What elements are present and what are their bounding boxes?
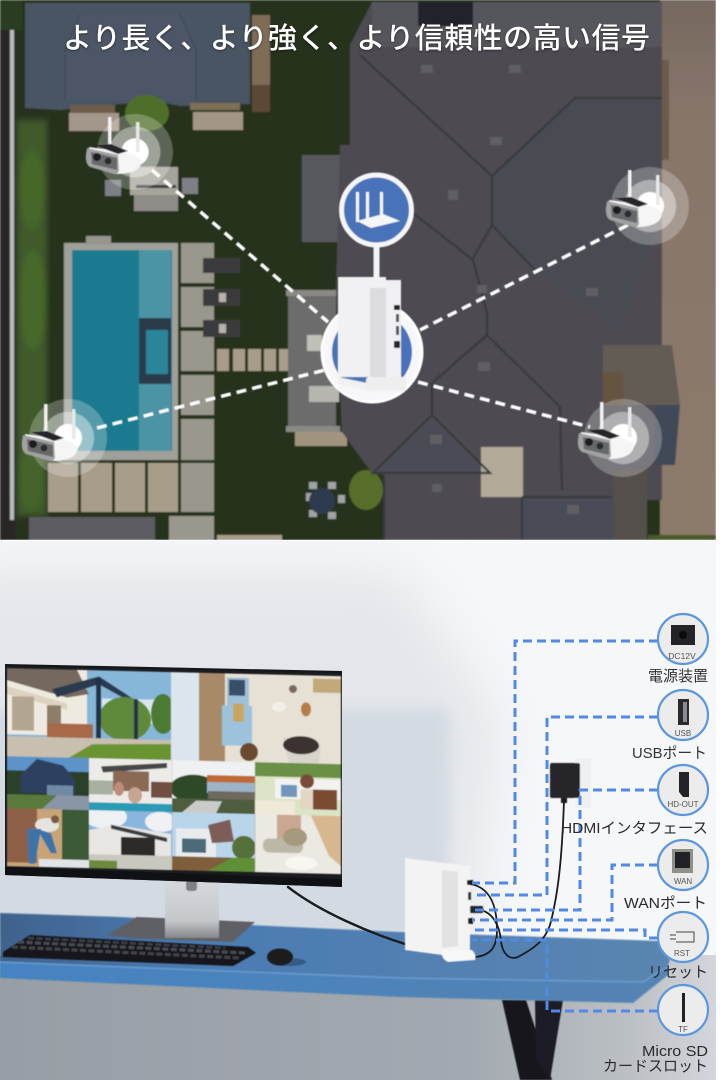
desk surface — [0, 913, 672, 1003]
tile: interior top view — [254, 813, 342, 875]
tile: pool with people — [88, 757, 173, 813]
tile: white house — [88, 809, 173, 871]
cables — [288, 800, 564, 958]
outdoor kitchen near camera — [130, 167, 178, 195]
port: WAN: WAN — [674, 877, 692, 886]
patio table with chairs — [306, 482, 345, 519]
dashed port connectors — [472, 641, 658, 1011]
port: HD-OUT — [658, 765, 708, 815]
camera: top right — [606, 167, 689, 245]
mouse — [267, 948, 306, 966]
tile: modern villa — [171, 811, 256, 873]
label: Micro SD card slot — [603, 1043, 708, 1075]
main house roof — [336, 2, 662, 540]
table legs — [502, 1000, 563, 1080]
roof top band with solar panel — [372, 2, 662, 47]
tile: patio house — [6, 668, 172, 761]
label: WAN: WANポート — [624, 895, 707, 912]
loungers — [203, 258, 240, 337]
port: DC12V: DC12V — [668, 651, 696, 661]
port: TF: TF — [678, 1025, 688, 1034]
small side roof — [302, 155, 340, 242]
tile: modern house by lake — [171, 759, 256, 815]
port: RST — [658, 912, 708, 962]
lawn background — [0, 0, 716, 540]
title: より長く、より強く、より信頼性の高い信号 — [63, 23, 650, 56]
icon: router badge — [342, 175, 412, 281]
hedge — [17, 120, 47, 516]
pavers — [169, 243, 214, 540]
label: power: 電源装置 — [648, 668, 708, 685]
bush — [349, 470, 383, 510]
port: RST: RST — [674, 949, 690, 958]
tile: living room top view — [170, 671, 342, 766]
monitor frame — [5, 665, 342, 887]
product: signal hub — [322, 277, 422, 402]
patio — [288, 293, 336, 429]
terrace — [481, 447, 523, 497]
aerial photo panel — [0, 0, 716, 540]
port: HD-OUT: HD-OUT — [667, 800, 699, 809]
monitor top edge — [5, 665, 342, 672]
port: USB: USB — [675, 729, 691, 738]
camera: bottom right — [578, 399, 662, 477]
camera: top left — [86, 114, 173, 190]
tile: blue house — [6, 756, 90, 811]
label: Micro SD card slot: カードスロット — [603, 1058, 708, 1075]
wood deck pieces — [662, 60, 669, 160]
power adapter — [550, 758, 591, 808]
port: TF — [658, 985, 708, 1035]
keyboard — [3, 935, 256, 966]
monitor chin — [5, 867, 342, 887]
monitor stand — [107, 880, 255, 942]
spa — [139, 318, 171, 384]
port: DC12V — [658, 614, 708, 664]
pool water — [72, 250, 172, 451]
label: reset: リセット — [648, 964, 708, 981]
dashed signal links — [97, 170, 628, 428]
monitor — [5, 665, 342, 942]
port: USB — [658, 690, 708, 740]
under-desk wall — [0, 955, 716, 1080]
lower desk scene panel — [0, 541, 716, 1080]
neighbor house roof — [25, 3, 250, 110]
label: USB: USBポート — [632, 745, 707, 762]
roof ridges — [360, 55, 662, 540]
title: より長く、より強く、より信頼性の高い信号 — [63, 22, 650, 55]
label: HDMI: HDMIインタフェース — [561, 820, 708, 837]
port: WAN — [658, 840, 708, 890]
tile: delivery porch — [254, 762, 342, 817]
roof vents — [421, 65, 598, 514]
dirt strip right — [660, 0, 716, 540]
screen tiles — [7, 668, 341, 874]
label: Micro SD card slot: Micro SD — [642, 1043, 708, 1060]
product: hub on desk — [405, 858, 483, 962]
pool deck — [64, 243, 178, 460]
wall background — [0, 541, 716, 971]
camera: bottom left — [22, 399, 107, 477]
tile: worker at door — [6, 808, 90, 869]
lower left roof — [29, 517, 155, 540]
